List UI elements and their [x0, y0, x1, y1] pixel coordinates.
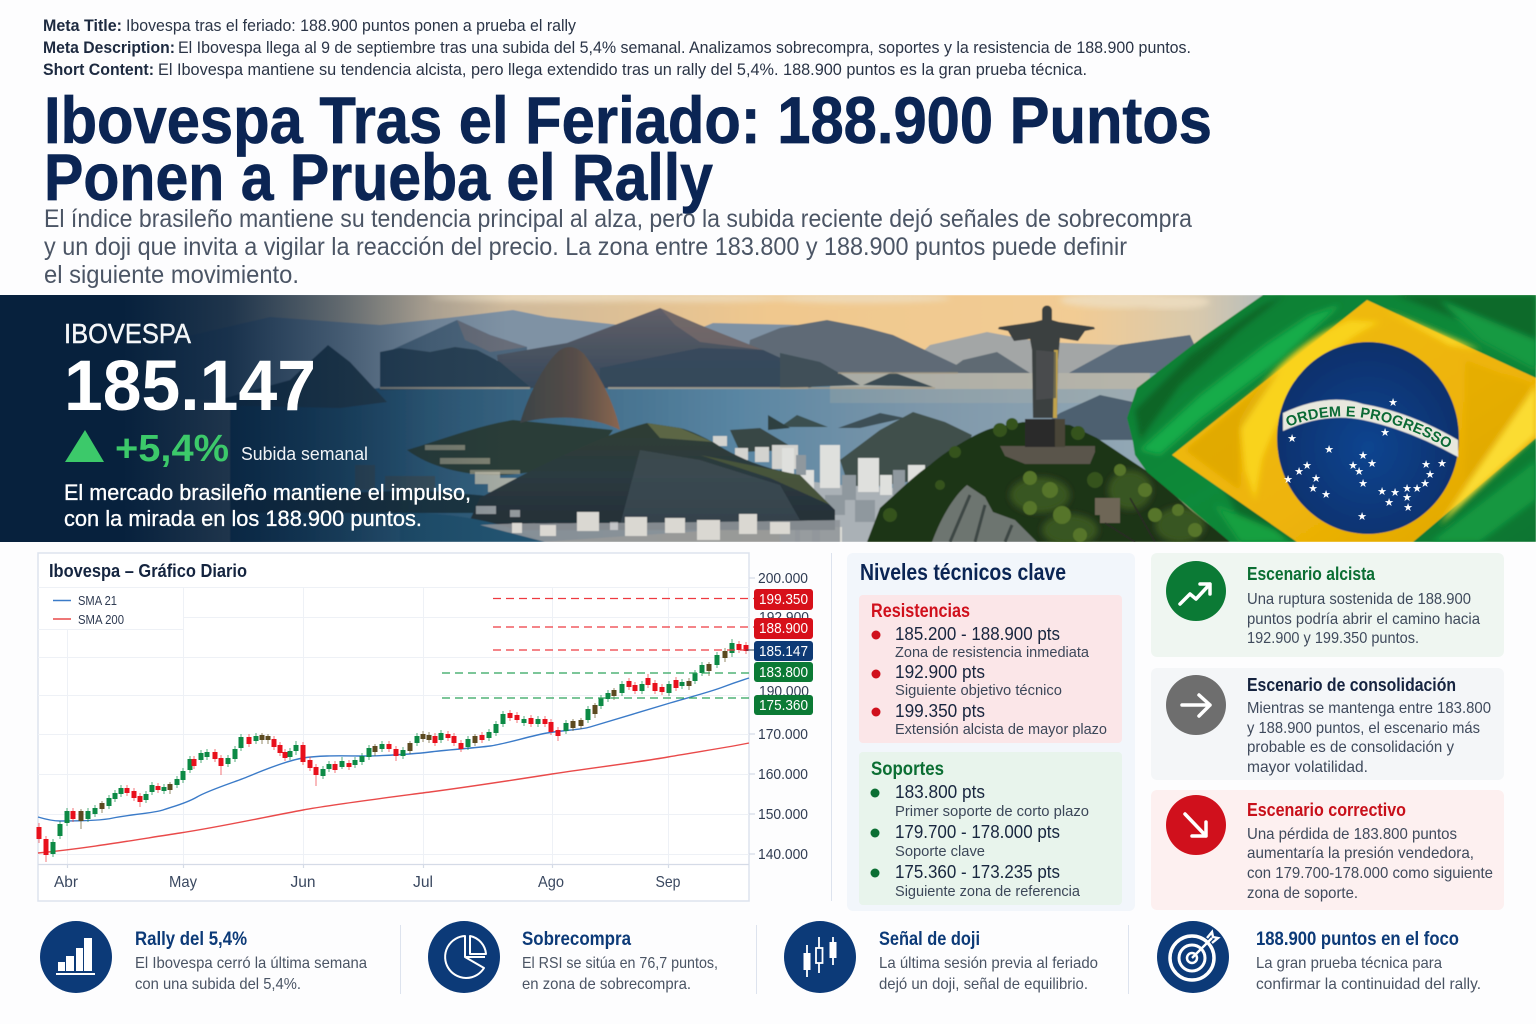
feature: doji: Señal de doji [879, 929, 980, 950]
resistances box: Zona de resistencia inmediata [895, 644, 1090, 661]
feature: doji: dejó un doji, señal de equilibrio. [879, 976, 1088, 993]
card: corrective scenario: aumentaría la presión vendedora, [1247, 845, 1474, 862]
meta text block: El Ibovespa llega al 9 de septiembre tras una subida del 5,4% semanal. Analizamos sobrecompra, soportes y la resistencia de 188.900 puntos. [178, 39, 1191, 57]
card: corrective scenario: con 179.700-178.000 como siguiente [1247, 865, 1493, 882]
feature: rally: con una subida del 5,4%. [135, 976, 301, 993]
candlesticks [39, 639, 755, 862]
meta text block: Meta Description: [43, 39, 175, 57]
flag [1127, 295, 1536, 542]
icon: candles [784, 921, 856, 993]
feature: overbought: El RSI se sitúa en 76,7 puntos, [522, 955, 718, 972]
hero index readout: El mercado brasileño mantiene el impulso, [64, 480, 471, 505]
dark foreshore [230, 490, 500, 513]
supports box: 175.360 - 173.235 pts [895, 862, 1060, 882]
hero index readout: IBOVESPA [64, 318, 191, 349]
feature: rally: El Ibovespa cerró la última semana [135, 955, 367, 972]
resistances box: 192.900 pts [895, 662, 985, 682]
price tags: 199.350 [759, 592, 808, 608]
hero index readout [64, 318, 471, 531]
title: Ibovespa Tras el Feriado: 188.900 Puntos [44, 83, 1212, 157]
meta text block [43, 17, 1191, 79]
icon: bar chart [40, 921, 112, 993]
corcovado hill [867, 422, 1232, 542]
supports box: Soportes [871, 759, 944, 780]
meta text block: Ibovespa tras el feriado: 188.900 puntos ponen a prueba el rally [126, 17, 577, 35]
subtitle: y un doji que invita a vigilar la reacción del precio. La zona entre 183.800 y 188.900 puntos puede definir [44, 233, 1127, 261]
card: corrective scenario: Una pérdida de 183.800 puntos [1247, 826, 1457, 843]
sugarloaf hill base [407, 420, 613, 475]
x axis labels: Abr [54, 874, 79, 891]
title [44, 83, 1212, 214]
feature: doji [784, 921, 1098, 993]
resistances box: 185.200 - 188.900 pts [895, 624, 1060, 644]
x axis labels: Jul [413, 874, 433, 891]
meta text block: Short Content: [43, 61, 154, 79]
feature: rally: Rally del 5,4% [135, 929, 247, 950]
y axis labels: 140.000 [758, 847, 808, 863]
meta text block: Meta Title: [43, 17, 122, 35]
moving average lines [38, 678, 749, 853]
icon: trend up [1166, 561, 1226, 621]
y axis labels: 150.000 [758, 807, 808, 823]
dark gradient overlay [0, 295, 488, 542]
resistances box [859, 595, 1122, 743]
card: bullish scenario: 192.900 y 199.350 puntos. [1247, 630, 1419, 647]
resistances box: Extensión alcista de mayor plazo [895, 721, 1107, 738]
flag motto: ORDEM E PROGRESSO [1286, 406, 1451, 447]
price tags [754, 589, 813, 715]
supports box: Primer soporte de corto plazo [895, 803, 1089, 820]
pedestal and statue [1024, 418, 1056, 448]
supports box [859, 752, 1122, 905]
supports box: 183.800 pts [895, 782, 985, 802]
shoreline buildings [480, 520, 840, 542]
card: consolidation scenario: probable es de consolidación y [1247, 739, 1454, 756]
resistances box: Resistencias [871, 601, 970, 622]
x axis labels: Ago [538, 874, 564, 891]
y axis labels: 160.000 [758, 767, 808, 783]
x axis labels: Jun [290, 874, 316, 891]
card: consolidation scenario: y 188.900 puntos, el escenario más [1247, 720, 1480, 737]
price tags: 183.800 [759, 665, 808, 681]
price tags: 185.147 [759, 644, 808, 660]
city behind hill [713, 436, 798, 469]
icon: arrow right [1166, 675, 1226, 735]
card: corrective scenario: Escenario correctivo [1247, 800, 1406, 820]
resistances box: Siguiente objetivo técnico [895, 682, 1062, 699]
subtitle: el siguiente movimiento. [44, 261, 299, 289]
steps and platform [1095, 498, 1120, 523]
feature: 188.900 target [1157, 921, 1481, 993]
card: corrective scenario [1151, 790, 1504, 910]
x axis labels [54, 874, 681, 891]
hero index readout: 185.147 [64, 347, 316, 426]
y axis labels: 192.900 [759, 610, 809, 626]
hero index readout: Subida semanal [241, 444, 368, 464]
x axis labels: Sep [656, 874, 681, 891]
panel: daily chart [38, 553, 813, 901]
card: consolidation scenario: Escenario de consolidación [1247, 675, 1456, 695]
landscape photo [168, 295, 1536, 542]
feature: doji: La última sesión previa al feriado [879, 955, 1098, 972]
hero index readout: con la mirada en los 188.900 puntos. [64, 506, 422, 531]
islands [780, 415, 828, 427]
panel: key technical levels [847, 553, 1135, 911]
feature: 188.900 target: 188.900 puntos en el foco [1256, 929, 1459, 950]
card: bullish scenario [1151, 553, 1504, 657]
card: consolidation scenario: mayor volatilidad. [1247, 759, 1368, 776]
legend: SMA 200 [78, 613, 124, 627]
card: corrective scenario: zona de soporte. [1247, 885, 1358, 902]
icon: target [1157, 921, 1229, 993]
feature: 188.900 target: confirmar la continuidad del rally. [1256, 976, 1481, 993]
y axis labels: 190.000 [759, 684, 809, 700]
price tags: 175.360 [759, 698, 808, 714]
feature: overbought [428, 921, 718, 993]
legend: SMA 21 [78, 594, 117, 608]
icon: arrow down right [1166, 795, 1226, 855]
x axis labels: May [169, 874, 197, 891]
supports box: Soporte clave [895, 843, 985, 860]
feature: overbought: en zona de sobrecompra. [522, 976, 691, 993]
hero banner [0, 295, 1536, 542]
subtitle: El índice brasileño mantiene su tendencia principal al alza, pero la subida reciente dejó señales de sobrecompra [44, 205, 1192, 233]
subtitle [44, 205, 1192, 289]
resistances box: 199.350 pts [895, 701, 985, 721]
title: Ponen a Prueba el Rally [44, 140, 713, 214]
sugarloaf [520, 347, 620, 430]
feature: rally [40, 921, 367, 993]
chart heading: Ibovespa – Gráfico Diario [49, 561, 247, 581]
supports box: Siguiente zona de referencia [895, 883, 1081, 900]
feature: overbought: Sobrecompra [522, 929, 631, 950]
levels heading: Niveles técnicos clave [860, 559, 1066, 585]
card: bullish scenario: Una ruptura sostenida de 188.900 [1247, 591, 1471, 608]
card: bullish scenario: Escenario alcista [1247, 564, 1376, 584]
flag stars: ★★★★★★★★★★★★★★★★★★★★★★★★★★★ [1283, 396, 1447, 523]
y axis labels [758, 571, 809, 863]
legend [53, 594, 124, 627]
y axis labels: 200.000 [758, 571, 808, 587]
card: bullish scenario: puntos podría abrir el camino hacia [1247, 611, 1480, 628]
card: consolidation scenario: Mientras se mantenga entre 183.800 [1247, 700, 1491, 717]
meta text block: El Ibovespa mantiene su tendencia alcista, pero llega extendido tras un rally del 5,4%. 188.900 puntos es la gran prueba técnica. [158, 61, 1087, 79]
icon: pie chart [428, 921, 500, 993]
price tags: 188.900 [759, 621, 808, 637]
feature: 188.900 target: La gran prueba técnica para [1256, 955, 1442, 972]
front mountain [470, 423, 835, 530]
supports box: 179.700 - 178.000 pts [895, 822, 1060, 842]
card: consolidation scenario [1151, 668, 1504, 780]
icon: up triangle [65, 430, 104, 462]
hero index readout: +5,4% [115, 428, 229, 470]
y axis labels: 170.000 [758, 727, 808, 743]
price level lines [442, 598, 755, 698]
